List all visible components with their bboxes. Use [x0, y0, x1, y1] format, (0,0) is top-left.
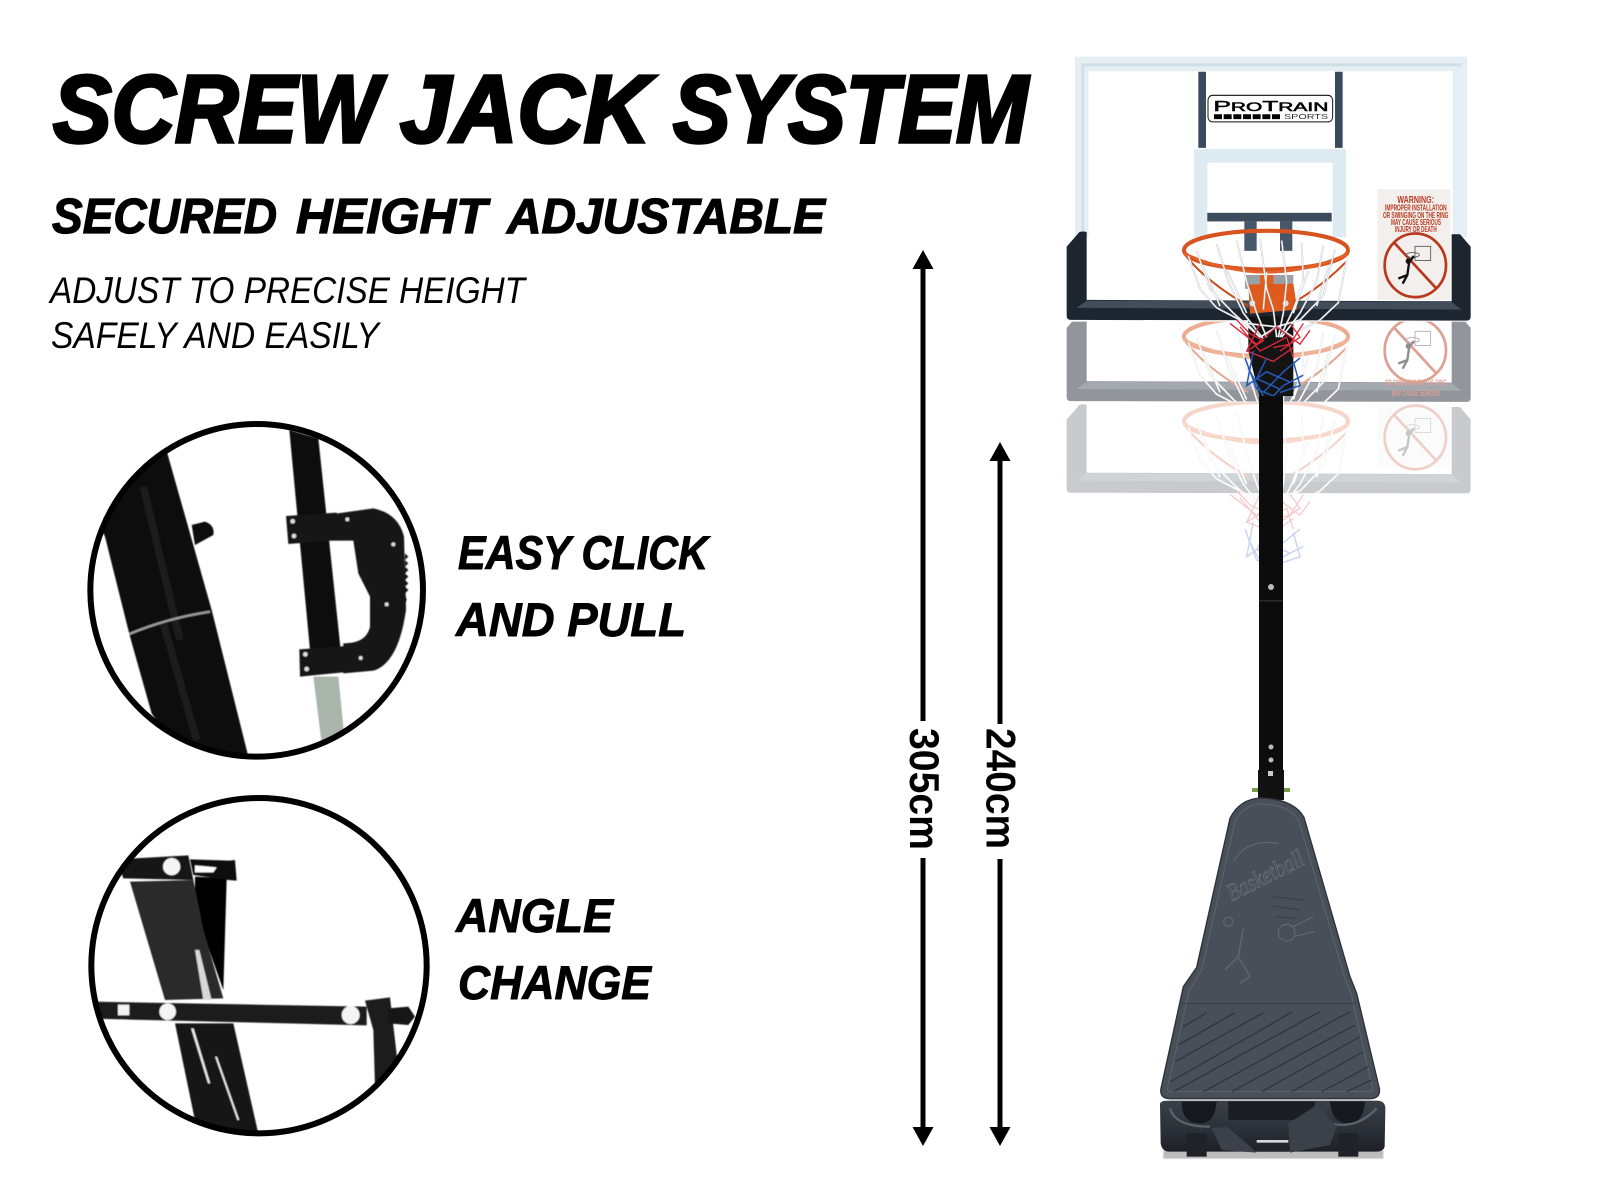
icon: main pole	[103, 453, 248, 754]
arrow: 240cm height dimension	[978, 442, 1024, 1146]
subtitle: SECURED	[52, 190, 277, 244]
warning sign: INJURY OR DEATH	[1395, 225, 1437, 234]
warning sign: OR SWINGING ON THE RING	[1383, 211, 1448, 220]
subtitle: HEIGHT	[296, 190, 491, 244]
label: angle change: CHANGE	[458, 956, 653, 1009]
subtitle	[52, 190, 826, 244]
subtitle: ADJUSTABLE	[506, 190, 826, 244]
hoop rim and net	[1184, 231, 1349, 396]
description text: ADJUST TO PRECISE HEIGHT	[48, 270, 527, 311]
label: easy click and pull: AND PULL	[455, 593, 686, 646]
icon: pull handle	[286, 430, 408, 743]
base cover plate	[1161, 798, 1379, 1099]
label: easy click and pull: EASY CLICK	[458, 526, 711, 579]
backboard frame	[1075, 57, 1467, 251]
title: JACK	[400, 56, 656, 163]
backboard bottom pad	[1067, 231, 1471, 321]
logo: ProTrain Sports: PRO TRAIN	[1213, 98, 1328, 115]
icon: weighted base	[1160, 798, 1385, 1159]
icon: tilt bracket	[93, 855, 415, 1137]
icon: basketball backboard and hoop	[1067, 57, 1471, 567]
logo: ProTrain Sports: SPORTS	[1284, 114, 1329, 121]
hoop bracket	[1245, 275, 1297, 396]
description text	[48, 270, 527, 356]
title	[53, 56, 1030, 163]
label: angle change	[455, 889, 653, 1009]
logo: ProTrain Sports	[1208, 95, 1333, 122]
label: easy click and pull	[455, 526, 711, 646]
reflection: first faded backboard: OR SWINGING ON THE RING	[1385, 378, 1447, 388]
icon: pole	[1252, 396, 1290, 800]
arrow: 240cm height dimension: 240cm	[978, 728, 1024, 849]
panel: angle change detail circle	[91, 798, 427, 1137]
reflection: second faded backboard	[1067, 402, 1471, 567]
label: angle change: ANGLE	[455, 889, 615, 942]
warning sign: MAY CAUSE SERIOUS	[1391, 218, 1441, 227]
title: SCREW	[53, 56, 387, 163]
title: SYSTEM	[673, 56, 1030, 163]
arrow: 305cm height dimension: 305cm	[901, 728, 948, 850]
description text: SAFELY AND EASILY	[51, 315, 381, 356]
arrow: 305cm height dimension	[901, 250, 948, 1146]
warning sign: IMPROPER INSTALLATION	[1385, 204, 1447, 213]
warning sign: WARNING:	[1397, 195, 1434, 206]
reflection: first faded backboard	[1066, 322, 1471, 403]
panel: handle detail circle	[80, 410, 423, 757]
reflection: first faded backboard: MAY CAUSE SERIOUS	[1392, 389, 1440, 398]
water tank	[1160, 1101, 1385, 1157]
embossed lettering: Basketball	[1222, 845, 1309, 907]
base shadow	[1163, 1151, 1383, 1159]
warning sign	[1377, 189, 1451, 300]
